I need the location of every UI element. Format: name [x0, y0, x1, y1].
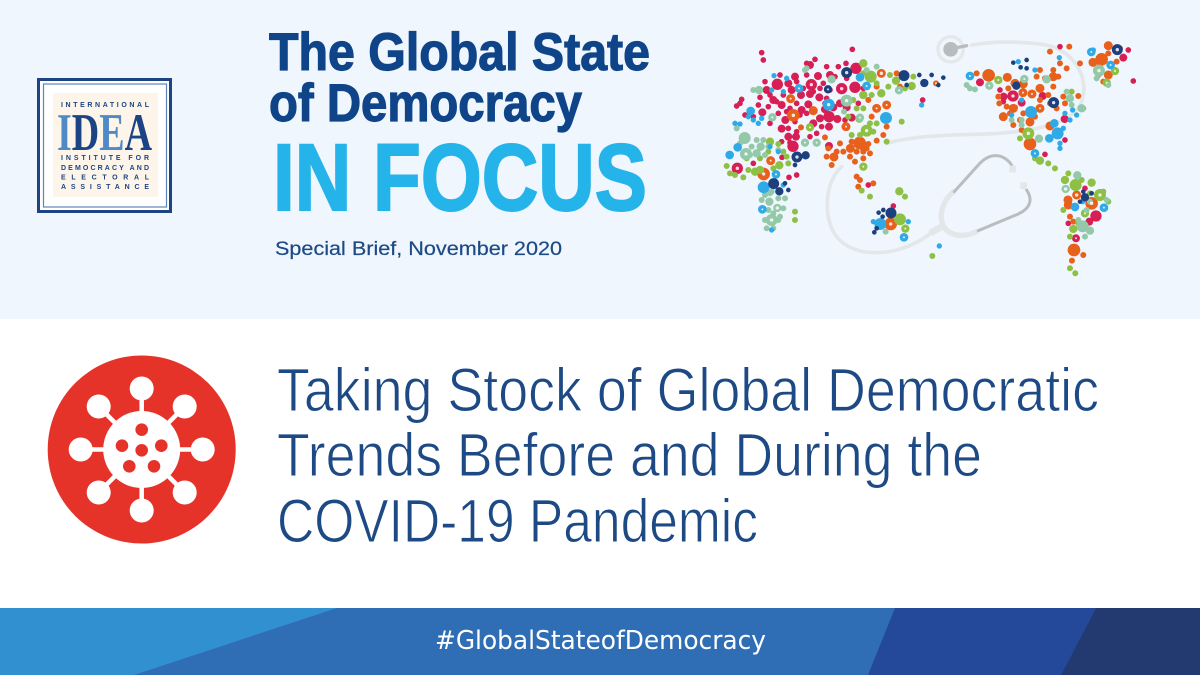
- logo: International IDEA: INSTITUTE FOR: [61, 155, 149, 162]
- logo: International IDEA: INTERNATIONAL: [61, 102, 150, 109]
- hashtag: #GlobalStateofDemocracy: [435, 626, 766, 656]
- dots: sea green: [737, 67, 1108, 237]
- header panel: [0, 0, 1200, 319]
- heading: The Global State of Democracy: of Democracy: [269, 74, 582, 133]
- logo: International IDEA: DEMOCRACY AND: [61, 165, 149, 172]
- main title: [277, 356, 1099, 555]
- virus icon: [48, 356, 236, 544]
- dots: navy: [774, 50, 1117, 232]
- subheading: date: Special Brief, November 2020: [275, 239, 562, 260]
- dots: icon centres: [737, 50, 1117, 238]
- main title: COVID-19 Pandemic: [277, 487, 758, 555]
- heading: The Global State of Democracy: The Global State: [269, 23, 650, 82]
- logo: International IDEA: ELECTORAL: [61, 174, 150, 182]
- footer banner: [0, 608, 1200, 675]
- logo: International IDEA: [38, 80, 170, 212]
- dots: orange: [764, 46, 1120, 261]
- dots: green: [727, 63, 1115, 273]
- dots: light blue: [730, 50, 1111, 246]
- logo: International IDEA: IDEA: [57, 104, 152, 162]
- heading: The Global State of Democracy: [269, 23, 650, 133]
- stethoscope: [827, 37, 1084, 253]
- main title: Taking Stock of Global Democratic: [277, 356, 1099, 424]
- heading: In Focus: IN FOCUS: [273, 125, 647, 231]
- illustration: world map of dots with stethoscope: [727, 37, 1133, 273]
- main title: Trends Before and During the: [277, 421, 982, 489]
- logo: International IDEA: ASSISTANCE: [61, 184, 149, 191]
- dots: crimson: [737, 47, 1133, 238]
